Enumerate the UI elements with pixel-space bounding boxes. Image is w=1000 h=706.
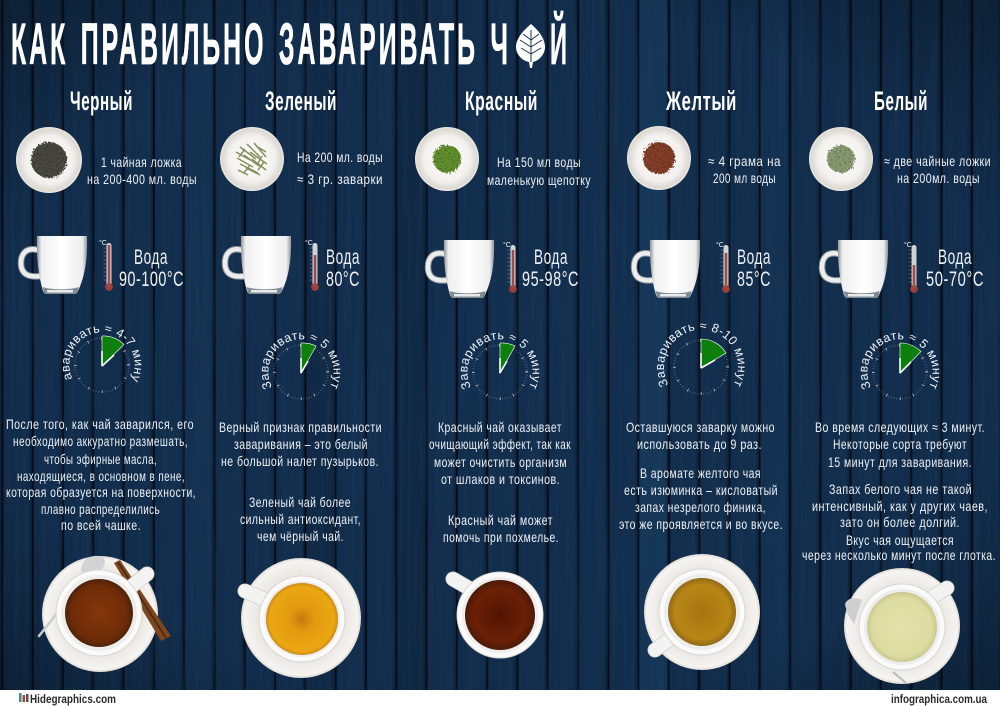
body text: не большой налет пузырьков.	[221, 453, 379, 469]
body text: запах незрелого финика,	[635, 499, 766, 515]
icon: plate with white tea	[809, 127, 873, 191]
column: black tea	[6, 86, 197, 672]
icon: thermometer	[904, 241, 918, 293]
water temperature: 85°C	[737, 268, 771, 291]
icon: mug	[634, 240, 700, 298]
footer	[0, 690, 1000, 706]
body text: Красный чай может	[448, 512, 553, 528]
body text: необходимо аккуратно размешать,	[13, 433, 188, 449]
icon: plate with red tea	[415, 127, 479, 191]
water temperature: Вода	[737, 246, 771, 269]
column: red tea	[415, 86, 591, 658]
body text: Вкус чая ощущается	[846, 532, 954, 548]
body text	[802, 419, 996, 563]
water temperature: 80°C	[326, 268, 360, 291]
body text: После того, как чай заварился, его	[6, 416, 194, 432]
body text: В аромате желтого чая	[640, 465, 761, 481]
icon: plate with yellow tea	[627, 126, 691, 190]
column: green tea	[219, 86, 383, 678]
dosage text: 1 чайная ложка	[101, 154, 182, 170]
dosage text: На 200 мл. воды	[297, 149, 383, 165]
illustration: cup of green tea	[241, 558, 361, 678]
water temperature: Вода	[326, 246, 360, 269]
body text	[619, 419, 783, 532]
illustration: cup of red tea	[453, 572, 543, 658]
icon: mug	[822, 240, 888, 298]
water temperature	[522, 246, 579, 291]
illustration: cup of yellow tea	[644, 554, 760, 670]
body text: есть изюминка – кисловатый	[624, 482, 778, 498]
dosage text: на 200-400 мл. воды	[87, 171, 197, 187]
body text: очищающий эффект, так как	[429, 436, 571, 452]
timer: 4-7 minutes: Заваривать ≈ 4-7 минут	[62, 326, 142, 382]
body text: находящиеся, в основном в пене,	[17, 468, 185, 484]
illustration: cup of black tea	[39, 556, 171, 672]
dosage text	[297, 149, 383, 187]
timer: 5 minutes: Заваривать ≈ 5 минут	[262, 332, 340, 390]
body text: Оставшуюся заварку можно	[626, 419, 775, 435]
dosage text: маленькую щепотку	[487, 172, 591, 188]
icon: thermometer	[305, 239, 319, 291]
body text: плавно распределились	[41, 501, 160, 517]
body text	[429, 419, 571, 545]
heading: yellow: Желтый	[665, 86, 737, 116]
icon: plate with green tea	[220, 127, 284, 191]
column: white tea	[802, 86, 996, 684]
icon: tea leaf	[516, 24, 545, 68]
icon: mug	[225, 236, 291, 294]
body text: чем чёрный чай.	[257, 528, 344, 544]
icon: mug	[428, 240, 494, 298]
body text	[219, 419, 382, 544]
timer: 5 minutes: Заваривать ≈ 5 минут	[460, 332, 540, 390]
icon: hidegraphics bars	[19, 693, 28, 702]
body text: Красный чай оказывает	[438, 419, 562, 435]
dosage text	[87, 154, 197, 187]
credit: hidegraphics: Hidegraphics.com	[30, 694, 116, 706]
water temperature	[737, 246, 771, 291]
timer: 8-10 minutes: Заваривать ≈ 8-10 минут	[657, 324, 745, 388]
body text: чтобы эфирные масла,	[44, 451, 157, 467]
body text: Зеленый чай более	[249, 494, 351, 510]
body text: помочь при похмелье.	[443, 529, 559, 545]
body text	[6, 416, 196, 533]
water temperature	[119, 246, 184, 291]
body text: зато он более долгий.	[840, 514, 960, 530]
dosage text	[708, 153, 781, 186]
body text: использовать до 9 раз.	[637, 436, 762, 452]
dosage text: ≈ 3 гр. заварки	[297, 171, 383, 187]
heading: red: Красный	[465, 86, 538, 116]
dosage text	[884, 153, 991, 186]
dosage text	[487, 154, 591, 188]
body text: от шлаков и токсинов.	[441, 471, 560, 487]
body text: это же проявляется и во вкусе.	[619, 516, 783, 532]
body text: которая образуется на поверхности,	[6, 484, 196, 500]
heading: green: Зеленый	[265, 86, 337, 116]
heading: black: Черный	[70, 86, 133, 116]
body text: может очистить организм	[434, 454, 567, 470]
water temperature: Вода	[534, 246, 568, 269]
icon: plate with black tea	[16, 127, 82, 193]
body text: по всей чашке.	[61, 517, 141, 533]
water temperature: 90-100°C	[119, 268, 184, 291]
water temperature: Вода	[938, 246, 972, 269]
water temperature: 95-98°C	[522, 268, 579, 291]
water temperature: Вода	[134, 246, 168, 269]
dosage text: На 150 мл воды	[497, 154, 581, 170]
text: Й	[550, 12, 567, 77]
dosage text: 200 мл воды	[713, 170, 776, 186]
dosage text: ≈ 4 грама на	[708, 153, 781, 169]
icon: thermometer	[716, 241, 730, 293]
heading: white: Белый	[874, 86, 928, 116]
body text: заваривания – это белый	[234, 436, 368, 452]
title	[11, 12, 567, 77]
water temperature	[326, 246, 360, 291]
icon: thermometer	[503, 241, 517, 293]
body text: Верный признак правильности	[219, 419, 382, 435]
icon: thermometer	[99, 239, 113, 291]
icon: mug	[21, 236, 87, 294]
illustration: cup of white tea	[844, 568, 960, 684]
body text: сильный антиоксидант,	[240, 511, 361, 527]
column: yellow tea	[619, 86, 783, 670]
water temperature	[926, 246, 984, 291]
timer: 5 minutes: Заваривать ≈ 5 минут	[860, 332, 940, 390]
